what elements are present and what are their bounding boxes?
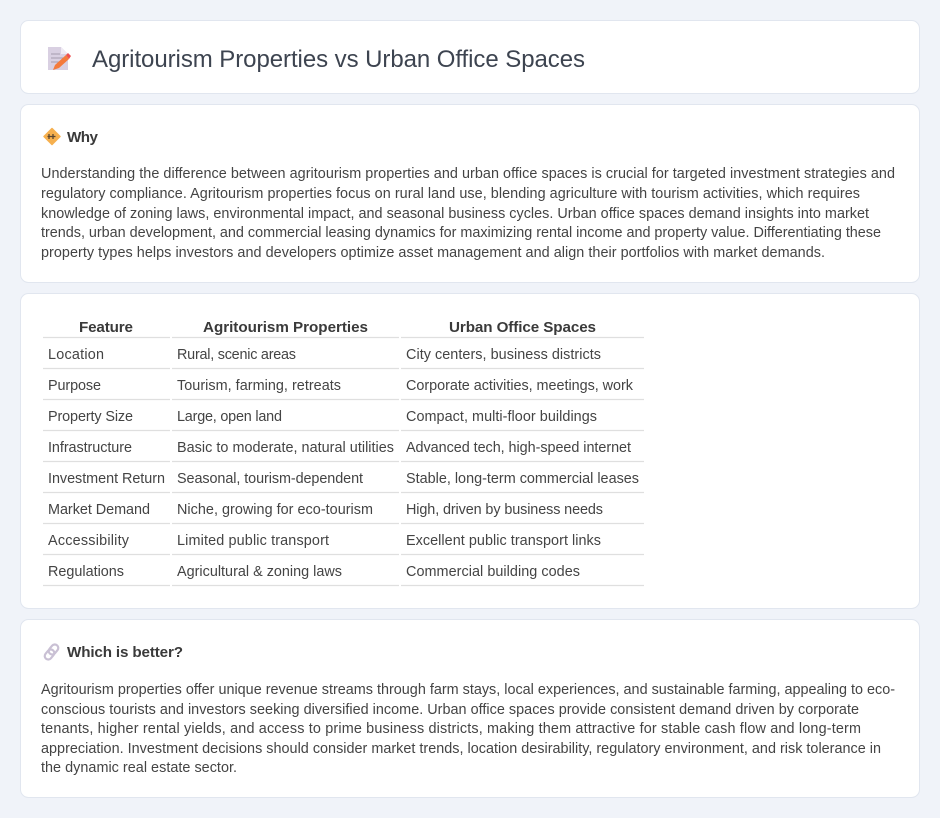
row: market demand: High, driven by business needs — [406, 502, 603, 518]
heading: why: Why — [67, 129, 99, 146]
row: infrastructure: Basic to moderate, natural utilities — [177, 440, 394, 456]
table header: Urban Office Spaces — [449, 319, 596, 336]
row: accessibility — [48, 533, 601, 549]
row: accessibility: Excellent public transport links — [406, 533, 601, 549]
icon: link — [43, 643, 60, 661]
row: location: Location — [48, 347, 104, 363]
icon: warning diamond — [44, 128, 60, 144]
row: location: City centers, business districts — [406, 347, 601, 363]
which paragraph: Agritourism properties offer unique revenue streams through farm stays, local experiences, and sustainable farming, appealing to eco- — [41, 682, 895, 698]
row: regulations — [48, 564, 580, 580]
row: regulations: Agricultural & zoning laws — [177, 564, 342, 580]
row: market demand — [48, 502, 603, 518]
panel: why — [20, 104, 920, 282]
row: investment return: Stable, long-term commercial leases — [406, 471, 639, 487]
row: accessibility: Limited public transport — [177, 533, 329, 549]
row: infrastructure: Advanced tech, high-speed internet — [406, 440, 631, 456]
row: property size: Property Size — [48, 409, 133, 425]
row: location — [48, 347, 601, 363]
which paragraph: conscious tourists and investors seeking diversified income. Urban office spaces provide consistent demand driven by corporate — [41, 702, 859, 718]
row: location: Rural, scenic areas — [177, 347, 296, 363]
why paragraph: Understanding the difference between agritourism properties and urban office spaces is crucial for targeted investment strategies and — [41, 166, 895, 182]
row: accessibility: Accessibility — [48, 533, 130, 549]
panel: which is better — [20, 620, 920, 798]
row: purpose — [48, 378, 634, 394]
row: infrastructure — [48, 440, 631, 456]
row: property size: Compact, multi-floor buildings — [406, 409, 597, 425]
row: property size: Large, open land — [177, 409, 282, 425]
row: investment return: Investment Return — [48, 471, 165, 487]
why paragraph: trends, urban development, and commercial leasing dynamics for maximizing rental income and property value. Differentiating these — [41, 225, 881, 241]
which paragraph — [41, 682, 895, 776]
panel: title — [20, 20, 920, 94]
why paragraph: property types helps investors and developers optimize asset management and align their portfolios with market demands. — [41, 245, 825, 261]
table header: Agritourism Properties — [203, 319, 368, 336]
why paragraph: regulatory compliance. Agritourism properties focus on rural land use, blending agriculture with tourism activities, which requires — [41, 186, 860, 202]
why paragraph — [41, 166, 895, 261]
table header — [79, 319, 596, 336]
panel: comparison table — [20, 294, 920, 608]
row: market demand: Market Demand — [48, 502, 150, 518]
row: market demand: Niche, growing for eco-tourism — [177, 502, 373, 518]
icon: memo with pencil — [48, 47, 71, 70]
row: purpose: Corporate activities, meetings, work — [406, 378, 634, 394]
title text: Agritourism Properties vs Urban Office Spaces — [92, 46, 585, 73]
row: investment return — [48, 471, 639, 487]
row: regulations: Regulations — [48, 564, 124, 580]
table header: Feature — [79, 319, 133, 336]
row: regulations: Commercial building codes — [406, 564, 580, 580]
row: purpose: Tourism, farming, retreats — [177, 378, 341, 394]
which paragraph: appreciation. Investment decisions should consider market trends, location desirability, regulatory environment, and risk tolerance in — [41, 741, 881, 757]
row: purpose: Purpose — [48, 378, 101, 394]
row: investment return: Seasonal, tourism-dependent — [177, 471, 363, 487]
why paragraph: knowledge of zoning laws, environmental impact, and seasonal business cycles. Urban office spaces demand insights into market — [41, 206, 869, 222]
row: infrastructure: Infrastructure — [48, 440, 132, 456]
which paragraph: the dynamic real estate sector. — [41, 760, 237, 776]
which paragraph: tenants, higher rental yields, and access to prime business districts, making them attractive for stable cash flow and long-term — [41, 721, 861, 737]
row: property size — [48, 409, 597, 425]
heading: which is better: Which is better? — [67, 644, 183, 661]
